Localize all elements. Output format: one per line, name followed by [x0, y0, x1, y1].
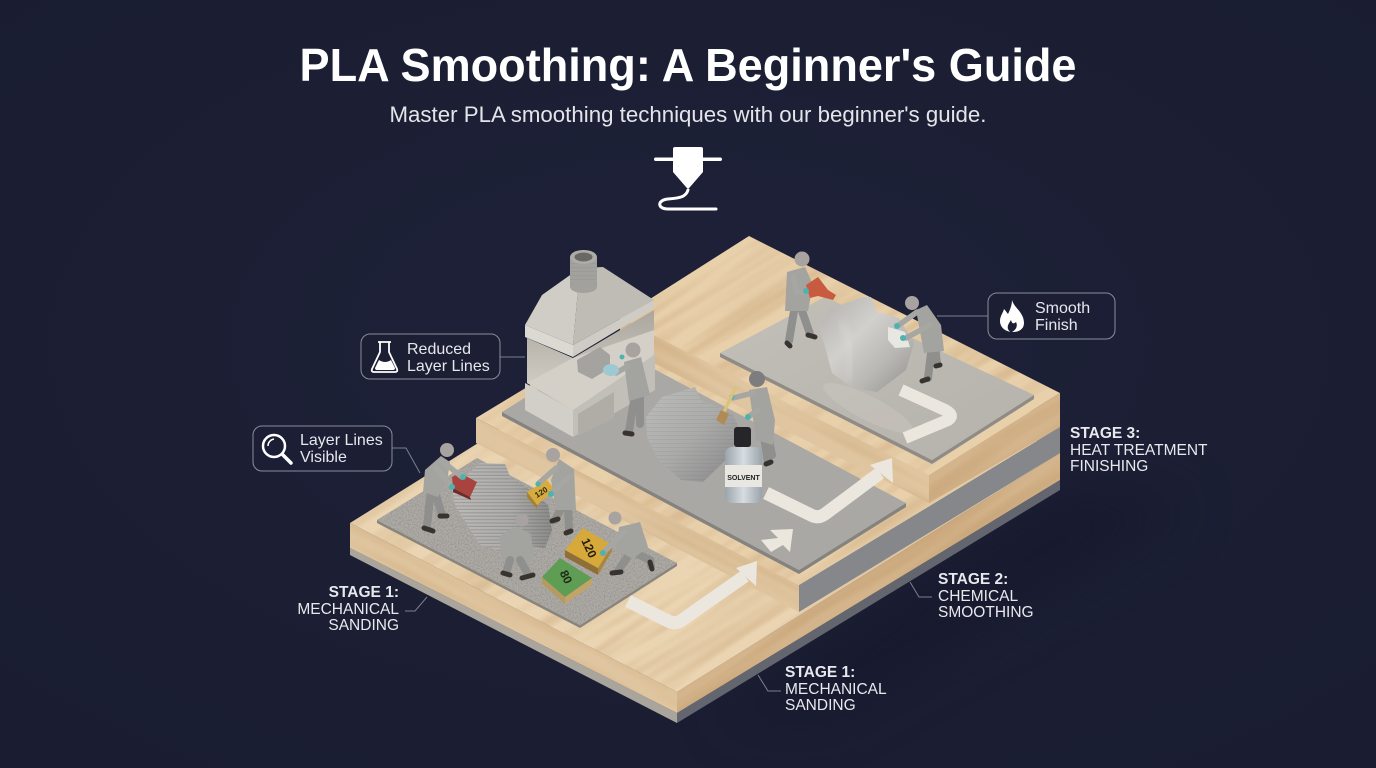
sanding block red	[452, 473, 477, 500]
label: stage 3: HEAT TREATMENT	[1070, 442, 1208, 459]
arrow: stage 2 to 3	[761, 458, 893, 552]
callout: Smooth Finish	[937, 293, 1115, 339]
callout: Layer Lines Visible: Layer Lines	[300, 432, 383, 449]
callout: Smooth Finish: Finish	[1035, 317, 1078, 334]
label: stage 3: STAGE 3:	[1070, 425, 1140, 442]
sanding block 120: 120	[578, 536, 600, 560]
slab shadow	[720, 490, 1190, 715]
sanding block 120	[565, 528, 612, 575]
label: stage 3	[1070, 425, 1208, 475]
layered print object, stage 2	[646, 387, 740, 482]
arrow: stage 3 path	[901, 390, 951, 438]
stage 1 slab	[350, 284, 1060, 723]
subtitle: Master PLA smoothing techniques with our beginner's guide.	[390, 102, 986, 127]
label: stage 1 left: SANDING	[328, 617, 399, 634]
figure: crouching sander right	[600, 512, 652, 573]
icon: flame	[1000, 300, 1024, 332]
label: stage 1 left	[297, 584, 427, 634]
label: stage 1 bottom: MECHANICAL	[785, 681, 887, 698]
label: stage 1 left: STAGE 1:	[329, 584, 399, 601]
label: stage 1 bottom	[758, 664, 887, 714]
isometric diorama	[350, 236, 1060, 723]
figure: worker with heat gun	[785, 252, 836, 346]
figure: sander standing	[535, 448, 576, 533]
sanding block yellow	[527, 480, 555, 509]
figure: worker polishing	[894, 296, 944, 381]
figure: crouching sander	[499, 514, 534, 578]
sanding block 80	[542, 558, 592, 604]
figure: worker with brush	[716, 371, 775, 464]
label: stage 2: SMOOTHING	[938, 604, 1034, 621]
sanding block 80: 80	[557, 568, 575, 586]
callout: Reduced Layer Lines: Layer Lines	[407, 358, 490, 375]
stage 2 plate	[502, 345, 906, 574]
callout: Reduced Layer Lines: Reduced	[407, 341, 471, 358]
solvent label: SOLVENT	[727, 475, 760, 482]
sanding block yellow: 120	[533, 485, 550, 500]
figure: worker at hood	[603, 342, 650, 434]
label: stage 1 left: MECHANICAL	[297, 601, 399, 618]
icon: magnifier	[263, 435, 291, 463]
label: stage 2: STAGE 2:	[938, 571, 1008, 588]
icon: flask	[372, 342, 397, 372]
callout: Layer Lines Visible: Visible	[300, 449, 347, 466]
layered print object, stage 1	[452, 463, 552, 552]
stage 3 slab	[620, 236, 1060, 503]
stage 3 plate	[720, 297, 1034, 464]
callout: Layer Lines Visible	[253, 426, 420, 473]
solvent bottle	[725, 427, 762, 503]
callout: Smooth Finish: Smooth	[1035, 300, 1090, 317]
fume hood	[525, 250, 655, 437]
arrow: stage 1 to 2	[628, 561, 757, 623]
icon: 3D printer nozzle	[654, 147, 722, 209]
label: stage 1 bottom: STAGE 1:	[785, 664, 855, 681]
label: stage 2	[910, 571, 1034, 621]
stage 1 plate	[377, 458, 677, 628]
callout: Reduced Layer Lines	[361, 334, 525, 379]
smooth print object, stage 3	[819, 297, 914, 392]
title: PLA Smoothing: A Beginner's Guide	[300, 39, 1076, 91]
label: stage 1 bottom: SANDING	[785, 697, 856, 714]
figure: sander left	[423, 443, 466, 531]
label: stage 2: CHEMICAL	[938, 588, 1018, 605]
stage 2 slab	[476, 260, 1060, 612]
cloth	[888, 327, 910, 348]
label: stage 3: FINISHING	[1070, 458, 1148, 475]
